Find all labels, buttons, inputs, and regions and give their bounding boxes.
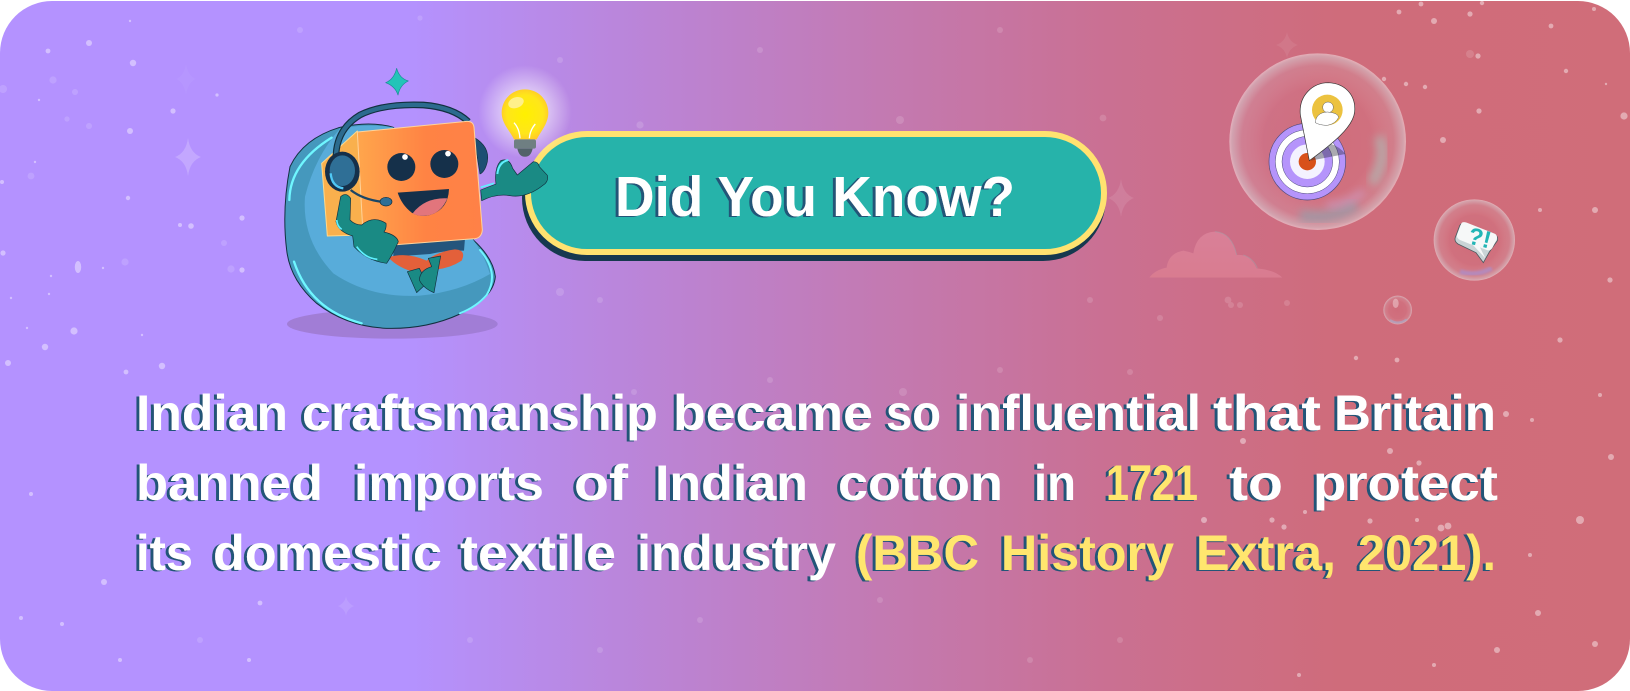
microphone boom bbox=[351, 190, 392, 206]
headset band bbox=[336, 105, 468, 160]
text line 3: History bbox=[1001, 525, 1174, 581]
body text block bbox=[136, 385, 1498, 581]
text line 3: industry bbox=[637, 525, 836, 581]
text line 1: influential bbox=[956, 385, 1201, 441]
bulb glow bbox=[478, 65, 572, 158]
text line 1: so bbox=[886, 385, 941, 441]
text line 2: imports bbox=[354, 455, 544, 511]
text line 3: domestic bbox=[213, 525, 442, 581]
speech icon: ?! bbox=[1465, 223, 1494, 254]
bubble: question speech bbox=[1434, 199, 1515, 281]
right arm and hand bbox=[481, 160, 548, 201]
text line 2: Indian bbox=[655, 455, 808, 511]
map pin bbox=[1300, 83, 1355, 161]
text line 1: craftsmanship bbox=[302, 385, 658, 441]
decorative sparkles bbox=[175, 32, 1298, 616]
text line 2: banned bbox=[136, 455, 323, 511]
bulb base bbox=[514, 139, 536, 149]
text line 3: Extra, bbox=[1196, 525, 1336, 581]
text line 2: protect bbox=[1313, 455, 1498, 511]
bean bag bbox=[285, 124, 495, 328]
floor shadow bbox=[287, 309, 498, 339]
text line 1: Britain bbox=[1334, 385, 1496, 441]
text line 3: 2021). bbox=[1358, 525, 1496, 581]
headset left cup bbox=[325, 152, 360, 192]
small bubble shell bbox=[1434, 199, 1515, 281]
text line 3: (BBC bbox=[856, 525, 979, 581]
text line 2: to bbox=[1229, 455, 1283, 511]
mascot character on bean bag bbox=[285, 65, 572, 339]
mouth bbox=[398, 189, 449, 216]
lightbulb bbox=[478, 65, 572, 158]
tiny bubble bbox=[1383, 296, 1412, 324]
cloud bbox=[1149, 232, 1282, 278]
text line 2 bbox=[136, 455, 1498, 511]
text line 1: that bbox=[1213, 385, 1321, 441]
text line 1: Indian bbox=[136, 385, 288, 441]
callout pill: Did You Know? bbox=[522, 134, 1106, 261]
text line 3 bbox=[136, 525, 1496, 581]
big bubble shell bbox=[1229, 53, 1406, 230]
box front bbox=[357, 121, 482, 247]
pill title: Did You Know? bbox=[615, 165, 1015, 229]
thumbs up hand bbox=[336, 195, 398, 263]
box body side bbox=[322, 131, 365, 236]
text line 3: textile bbox=[460, 525, 616, 581]
text line 2: cotton bbox=[838, 455, 1003, 511]
text line 1 bbox=[136, 385, 1496, 441]
legs and shoes bbox=[388, 238, 465, 293]
pill body bbox=[528, 134, 1104, 252]
target rings bbox=[1269, 123, 1346, 200]
text line 2: in bbox=[1034, 455, 1076, 511]
bulb glass bbox=[502, 89, 548, 139]
sparkle icon bbox=[386, 68, 408, 95]
headset right cup bbox=[474, 137, 488, 174]
text line 2: of bbox=[574, 455, 628, 511]
pill shadow bbox=[522, 135, 1106, 261]
bubble: location target bbox=[1229, 53, 1406, 230]
eyes bbox=[387, 150, 458, 181]
text line 3: its bbox=[136, 525, 193, 581]
text line 2: 1721 bbox=[1106, 455, 1198, 511]
text line 1: became bbox=[673, 385, 873, 441]
